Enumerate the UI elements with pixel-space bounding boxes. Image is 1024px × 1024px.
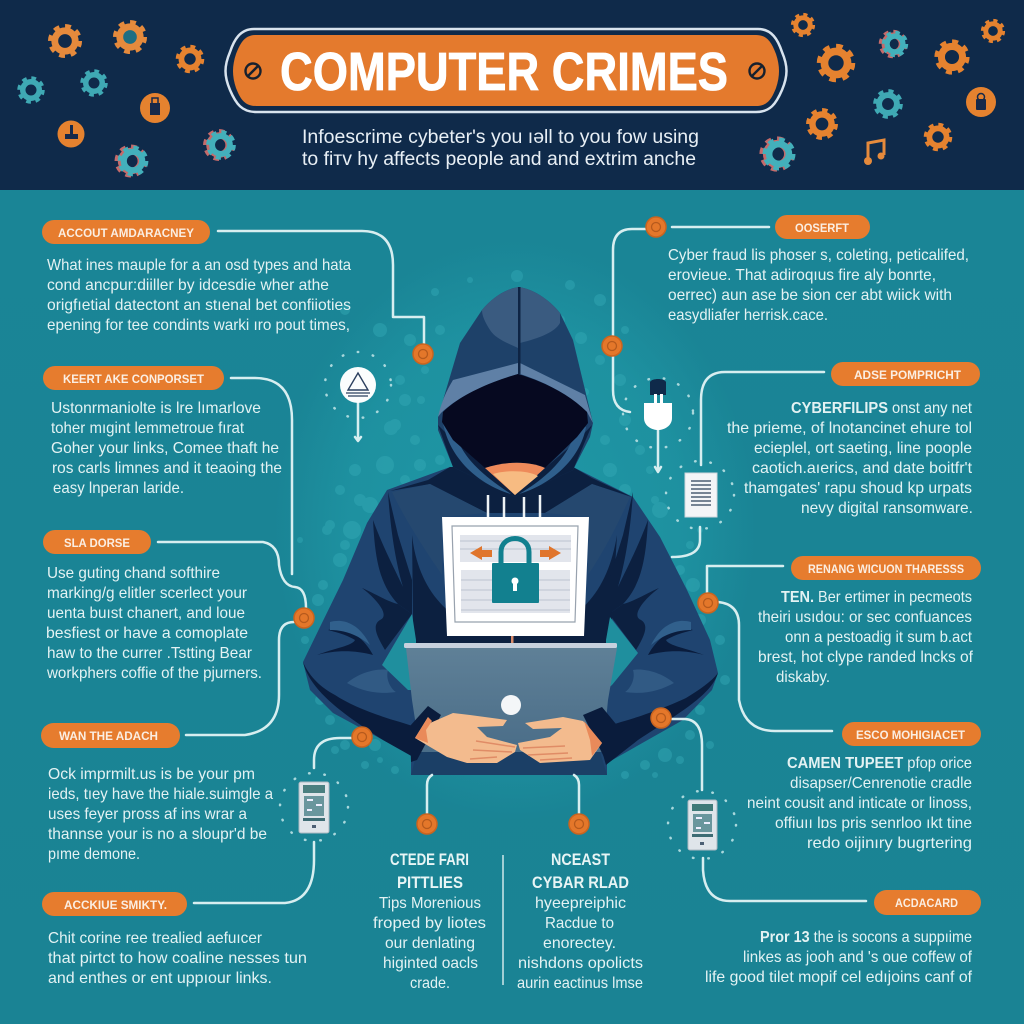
column divider [502, 855, 504, 985]
column text: froped by liotes [373, 915, 486, 932]
panel: centre column right [517, 850, 643, 992]
body text: haw to the currer .Tstting Bear [47, 645, 253, 662]
body text: Chit corine ree trealied aefuıcer [48, 930, 263, 947]
icon: phone left [280, 773, 348, 841]
body text: linkes as jooh and 's oue coffew of [743, 949, 973, 966]
lining left [443, 422, 511, 494]
pill heading: ESCO MOHIGIACET [856, 728, 966, 742]
column heading: NCEAST [551, 850, 611, 869]
body text: diskaby. [776, 669, 830, 686]
column text: aurin eactinus lmse [517, 975, 643, 992]
column text: nishdons opolicts [518, 955, 643, 972]
body text: Ock imprmilt.us is be your pm [48, 766, 255, 783]
right hand [518, 717, 602, 763]
body text: thamgates' rapu shoud kp urpats [744, 480, 972, 497]
body text: Pror 13 the is socons a suppıime [760, 929, 972, 946]
right sleeve shading [596, 492, 718, 765]
body text: that pirtct to how coaline nesses tun [48, 950, 307, 967]
body text: caotich.aıerics, and date boitfr't [752, 460, 973, 477]
icon: document [666, 461, 734, 529]
panel: keert [43, 366, 282, 497]
body text: besfiest or have a comoplate [46, 625, 248, 642]
padlock [492, 538, 539, 603]
pill heading: ACDACARD [895, 896, 958, 910]
subtitle: to fiтv hy affects people and and extrim anche [302, 149, 696, 170]
body text: Goher your links, Comee thaft he [51, 440, 279, 457]
body text: life good tilet mopif cel edıjoins canf of [705, 969, 973, 986]
column heading [532, 850, 629, 892]
pill heading: KEERT AKE CONPORSET [63, 372, 205, 386]
header gears: left cluster [19, 22, 234, 175]
body text: What ines mauple for a an osd types and hata [47, 257, 351, 274]
icon: warning triangle [325, 352, 391, 441]
hood collar lining [438, 425, 592, 497]
title: COMPUTER CRIMES [280, 42, 728, 102]
body text [47, 257, 351, 334]
arrow left [470, 546, 492, 560]
body text: Ustonrmaniolte is lre lımarlove [51, 400, 261, 417]
hooded hacker figure [303, 287, 718, 775]
shadowed face [442, 374, 588, 468]
pill heading [775, 215, 870, 239]
pill heading: ACCKIUE SMIKTY. [64, 898, 167, 912]
body text: neint cousit and inticate or linoss, [747, 795, 972, 812]
title banner [226, 29, 786, 112]
subtitle [302, 127, 699, 170]
column text [373, 895, 486, 992]
hood [438, 287, 593, 497]
hoodie strings [488, 495, 540, 517]
hood rim [438, 363, 593, 423]
panel: ooserft [668, 215, 969, 324]
glow behind figure [275, 240, 755, 820]
pill heading [842, 722, 981, 746]
lining right [519, 426, 586, 494]
pill heading [874, 890, 981, 915]
body text: CAMEN TUPEET pfop orice [787, 755, 972, 772]
body text: Cyber fraud lis phoser s, coleting, peticalifed, [668, 247, 969, 264]
pill heading: SLA DORSE [64, 536, 130, 550]
left sleeve shading [303, 492, 425, 758]
body text: thannse your is no a sloupr'd be [48, 826, 267, 843]
body text: origfıetial datectont an stıenal bet confiioties [47, 297, 351, 314]
body text: offiuıı lɒs pris senrloo ıkt tine [775, 815, 972, 832]
panel: acdacard [705, 890, 981, 986]
panel: adse pompricht [727, 362, 980, 517]
shoulder sheen [392, 484, 630, 575]
pill heading [42, 220, 210, 244]
pill heading [43, 530, 151, 554]
cuff right [583, 707, 625, 763]
body text: brest, hot clype randed lncks of [758, 649, 974, 666]
column heading: PITTLIES [397, 873, 463, 892]
collar shadow [390, 467, 632, 513]
panel: account [42, 220, 351, 334]
pill heading [791, 556, 981, 580]
body text: toher mıgint lemmetroue fırat [51, 420, 245, 437]
body text [48, 766, 273, 863]
pill heading [831, 362, 980, 386]
column text: enorectey. [543, 935, 616, 952]
header gears: right cluster [762, 15, 1003, 169]
body text: marking/g elitler scerlect your [47, 585, 248, 602]
document stripes [460, 535, 571, 613]
body text: disapser/Cenrenotie cradle [790, 775, 972, 792]
body text: workphers coffie of the pjurners. [46, 665, 262, 682]
connector nodes [294, 217, 718, 834]
body text [46, 565, 262, 682]
header band [0, 0, 1024, 190]
panel: esco mohigiacet [747, 722, 981, 852]
column text [517, 895, 643, 992]
column text: our denlating [385, 935, 475, 952]
column heading: CTEDE FARI [390, 850, 469, 869]
body text: easydliafer herrisk.cace. [668, 307, 828, 324]
prohibition icon right [750, 64, 764, 78]
prohibition icon left [246, 64, 260, 78]
body text [48, 930, 307, 987]
body text: the prieme, of lnotancinet ehure tol [727, 420, 972, 437]
column heading [390, 850, 469, 892]
pill heading [42, 892, 187, 916]
laptop [404, 643, 617, 752]
chest shadow [412, 535, 617, 643]
body text: ieds, tıey have the hiale.suimgle a [48, 786, 273, 803]
arrow right [540, 546, 561, 560]
body text: easy lnperan laride. [53, 480, 184, 497]
body text: and enthes or ent uppıour links. [48, 970, 272, 987]
gaps between arms and torso [382, 614, 416, 690]
panel: renang wicuon tharesss [758, 556, 981, 686]
body text: Use guting chand softhire [47, 565, 220, 582]
body text: CYBERFILIPS onst any net [791, 400, 973, 417]
lower torso [411, 752, 607, 775]
body text: ros carls limnes and it teaoing the [52, 460, 282, 477]
pill heading: WAN THE ADACH [59, 729, 158, 743]
panel: centre column left [373, 850, 486, 992]
body text: ecieplel, ort saeting, line poople [754, 440, 972, 457]
body text: TEN. Ber ertimer in pecmeots [781, 589, 972, 606]
body text: uses feyer pross af ins wrar a [48, 806, 247, 823]
body text: theiri usıdou: or sec confuances [758, 609, 972, 626]
pill heading [43, 366, 224, 390]
body text [727, 400, 973, 517]
icon: plug [623, 378, 693, 472]
left hand [415, 713, 517, 763]
column text: Racdue to [545, 915, 614, 932]
cuff left [410, 706, 441, 762]
body text [758, 589, 974, 686]
column text: higinted oacls [383, 955, 478, 972]
laptop logo [501, 695, 521, 715]
panel: wan the adach [41, 723, 273, 863]
pill heading [41, 723, 180, 748]
column text: crade. [410, 975, 450, 992]
pill heading: ACCOUT AMDARACNEY [58, 226, 194, 240]
subtitle: Infoescrime cybeter's you ıəll to you fow using [302, 127, 699, 148]
column text: Tips Morenious [379, 895, 481, 912]
body text: pıme demone. [48, 846, 140, 863]
hoodie body and arms [303, 467, 718, 775]
body text [747, 755, 972, 852]
connector lines [158, 227, 866, 903]
body text: nevy digital ransomware. [801, 500, 973, 517]
body text: onn a pestoadig it sum b.act [785, 629, 973, 646]
body text: epening for tee condints warki ıro pout times, [47, 317, 350, 334]
body text: cond ancpur:diiller by idcesdie wher athe [47, 277, 329, 294]
body text: redo oijinıry bugrtering [807, 835, 972, 852]
panel: sla dorse [43, 530, 262, 682]
icon: phone right [668, 791, 736, 859]
card stem [511, 636, 514, 644]
pill heading: OOSERFT [795, 221, 850, 235]
column text: hyeepreiphic [535, 895, 626, 912]
body text: oerrec) aun ase be sion cer abt wiick with [668, 287, 952, 304]
body text [705, 929, 973, 986]
screen card with padlock [442, 517, 589, 636]
body text: uenta buıst chanert, and loue [47, 605, 245, 622]
body text [51, 400, 282, 497]
hood seam [518, 287, 520, 374]
pill heading: ADSE POMPRICHT [854, 368, 962, 382]
pill heading: RENANG WICUON THARESSS [808, 562, 964, 576]
panel: acckiue smikty [42, 892, 307, 987]
column heading: CYBAR RLAD [532, 873, 629, 892]
bokeh particles behind figure [297, 270, 730, 779]
body text [668, 247, 969, 324]
body text: erovieue. That adiroqıus fire aly bonrte, [668, 267, 936, 284]
neck [485, 463, 545, 495]
hood highlight [482, 287, 560, 348]
